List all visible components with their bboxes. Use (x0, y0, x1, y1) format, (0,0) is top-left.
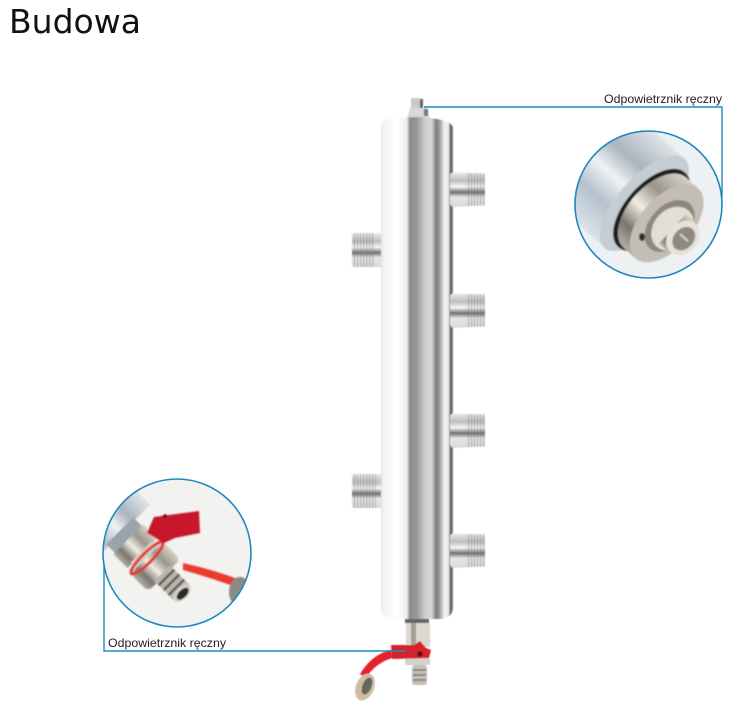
right fitting 4 (450, 533, 485, 568)
title: Budowa (9, 2, 141, 41)
right fitting 2 (450, 293, 485, 328)
red ring (128, 539, 166, 577)
detail circle: air vent (574, 130, 723, 279)
top air vent on pipe (407, 98, 430, 118)
right fitting 3 (450, 413, 485, 448)
red strap (182, 562, 236, 586)
grey disk (228, 576, 246, 602)
label: top: Odpowietrznik ręczny (604, 92, 722, 106)
red handle (147, 511, 200, 543)
connector line: bottom valve to detail (104, 560, 406, 651)
left upper fitting (352, 233, 385, 267)
hydraulic separator main unit (351, 98, 485, 703)
detail circle: drain ball valve (102, 478, 252, 628)
bottom ball valve (351, 619, 431, 703)
connector line: top vent to detail (424, 107, 722, 197)
left lower fitting (352, 474, 385, 508)
label: bottom: Odpowietrznik ręczny (108, 636, 226, 650)
valve assembly (104, 492, 192, 602)
right fitting 1 (450, 172, 485, 207)
cylinder body (381, 117, 453, 619)
